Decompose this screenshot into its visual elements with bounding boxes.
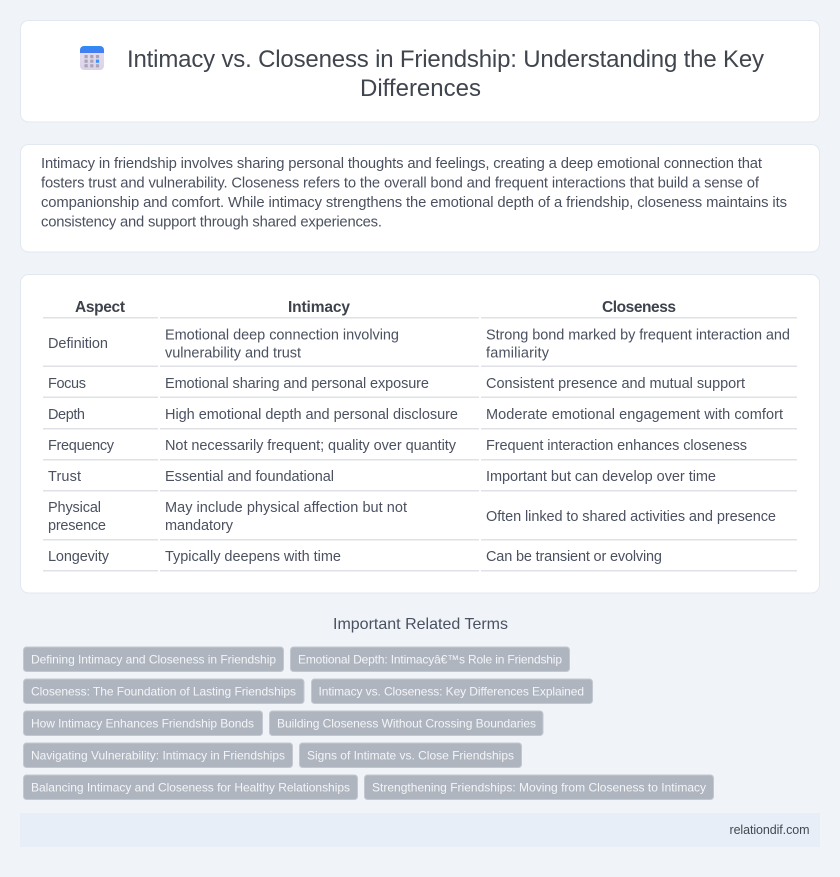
row: definition: vulnerability and trust (165, 346, 301, 362)
row: definition: familiarity (486, 346, 550, 362)
row: frequency: Not necessarily frequent; quality over quantity (165, 438, 457, 454)
table header row: Intimacy (288, 299, 350, 316)
row: longevity (48, 549, 662, 565)
tag: key differences (312, 679, 592, 704)
panel: comparison table (20, 274, 820, 593)
table rules (43, 317, 797, 572)
row: depth: High emotional depth and personal disclosure (165, 407, 458, 423)
footer (20, 813, 820, 847)
heading: important related terms: Important Related Terms (333, 616, 508, 633)
row: focus (48, 376, 745, 392)
row: depth: Depth (48, 407, 85, 423)
tag: building closeness: Building Closeness Without Crossing Boundaries (277, 716, 536, 730)
tag: key differences: Intimacy vs. Closeness: Key Differences Explained (318, 684, 584, 698)
row: physical presence: mandatory (165, 518, 234, 534)
table header row (75, 299, 676, 316)
row: focus: Emotional sharing and personal exposure (165, 376, 429, 392)
title (127, 46, 764, 102)
row: frequency: Frequency (48, 438, 115, 454)
row: trust (48, 469, 716, 485)
panel: header (20, 20, 820, 122)
row: definition: Emotional deep connection involving (165, 328, 399, 344)
icon: calendar (80, 46, 104, 70)
intro paragraph: fosters trust and vulnerability. Closeness refers to the overall bond and frequent interactions that build a sense of (41, 176, 760, 192)
row: definition: Definition (48, 336, 108, 352)
panel: introduction (20, 144, 820, 252)
tag: friendship bonds: How Intimacy Enhances Friendship Bonds (31, 716, 254, 730)
row: frequency: Frequent interaction enhances closeness (486, 438, 747, 454)
tag: defining intimacy (24, 647, 284, 672)
row: trust: Essential and foundational (165, 469, 334, 485)
tag: navigating vulnerability: Navigating Vulnerability: Intimacy in Friendships (31, 748, 285, 762)
tag: navigating vulnerability (24, 743, 292, 768)
row: focus: Consistent presence and mutual support (486, 376, 745, 392)
row: depth (48, 407, 783, 423)
table header row: Aspect (75, 299, 125, 316)
intro paragraph: Intimacy in friendship involves sharing personal thoughts and feelings, creating a deep emotional connection that (41, 156, 762, 172)
tag: emotional depth (290, 647, 570, 672)
row: longevity: Can be transient or evolving (486, 549, 662, 565)
row: definition: Strong bond marked by frequent interaction and (486, 328, 790, 344)
table header row: Closeness (602, 299, 676, 316)
row: trust: Trust (48, 469, 81, 485)
tag: signs: Signs of Intimate vs. Close Friendships (307, 748, 514, 762)
tag: signs (300, 743, 522, 768)
title: Intimacy vs. Closeness in Friendship: Understanding the Key (127, 46, 764, 73)
intro paragraph: companionship and comfort. While intimacy strengthens the emotional depth of a friendship, closeness maintains its (41, 195, 787, 211)
tag: friendship bonds (24, 711, 262, 736)
title: Differences (360, 75, 481, 102)
row: longevity: Typically deepens with time (165, 549, 341, 565)
related term tags (24, 647, 714, 800)
row: physical presence (48, 500, 776, 534)
tag: strengthening: Strengthening Friendships: Moving from Closeness to Intimacy (372, 780, 706, 794)
row: longevity: Longevity (48, 549, 110, 565)
row: frequency (48, 438, 747, 454)
row: physical presence: presence (48, 518, 106, 534)
footer: relationdif.com (730, 823, 810, 837)
row: focus: Focus (48, 376, 86, 392)
row: definition (48, 328, 790, 362)
intro paragraph: consistency and support through shared experiences. (41, 214, 382, 230)
tag: balancing (24, 775, 358, 800)
row: trust: Important but can develop over time (486, 469, 716, 485)
tag: closeness foundation: Closeness: The Foundation of Lasting Friendships (31, 684, 296, 698)
row: physical presence: Physical (48, 500, 101, 516)
tag: defining intimacy: Defining Intimacy and Closeness in Friendship (31, 652, 276, 666)
tag: emotional depth: Emotional Depth: Intimacyâ€™s Role in Friendship (298, 652, 562, 666)
intro paragraph (41, 156, 787, 230)
tag: balancing: Balancing Intimacy and Closeness for Healthy Relationships (31, 780, 350, 794)
tag: closeness foundation (24, 679, 304, 704)
row: physical presence: May include physical affection but not (165, 500, 407, 516)
tag: strengthening (364, 775, 714, 800)
row: depth: Moderate emotional engagement with comfort (486, 407, 783, 423)
tag: building closeness (270, 711, 543, 736)
row: physical presence: Often linked to shared activities and presence (486, 509, 776, 525)
